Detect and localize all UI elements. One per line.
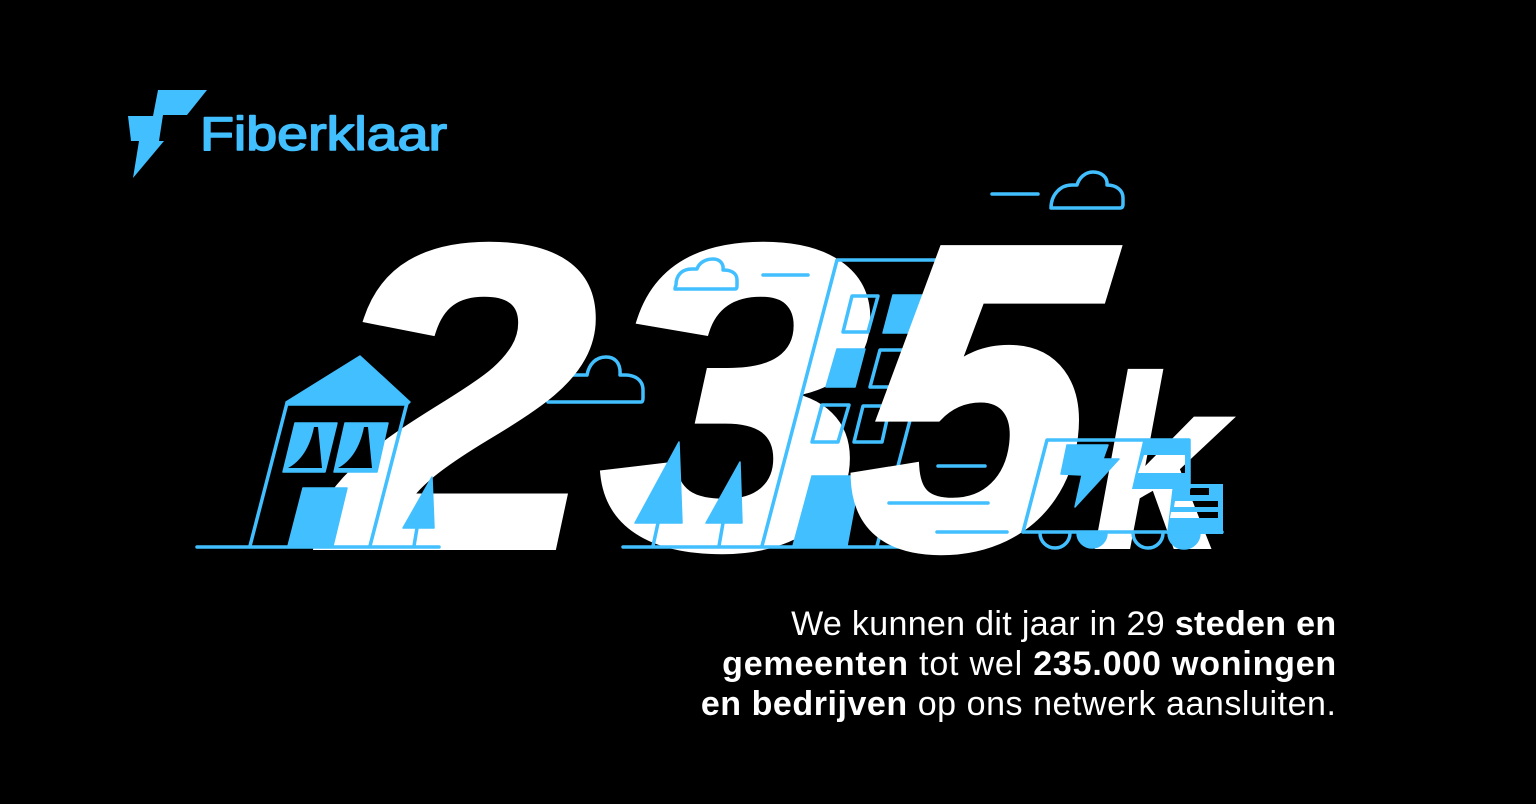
building door [793, 476, 860, 546]
ground line right [623, 545, 905, 549]
text block: description: We kunnen dit jaar in 29 steden en [791, 605, 1336, 643]
big number 5: 5 [832, 158, 1132, 638]
truck chassis [1023, 530, 1222, 534]
illustration: apartment building [762, 260, 952, 546]
text block: description: gemeenten tot wel 235.000 woningen [722, 645, 1337, 683]
house window left [283, 423, 337, 472]
logo wordmark: Fiberklaar [200, 107, 447, 160]
house roof [286, 356, 410, 405]
truck cargo panel [1132, 441, 1190, 489]
icon: top cloud [1051, 172, 1123, 208]
building outline [762, 260, 952, 546]
icon: cloud behind the 2 [548, 357, 643, 402]
text block: description: en bedrijven op ons netwerk aansluiten. [701, 685, 1336, 723]
building windows [812, 295, 922, 442]
tree two [706, 462, 742, 546]
text block: description [701, 605, 1337, 723]
truck bolt [1061, 445, 1119, 507]
dash beside top cloud [992, 192, 1038, 196]
big number 3: 3 [601, 158, 871, 638]
illustration: house [250, 356, 410, 546]
illustration: small tree [403, 477, 434, 546]
house window right [334, 423, 388, 472]
illustration: truck [1023, 440, 1223, 549]
logo: Fiberklaar [128, 90, 447, 178]
icon: cloud on the 3 [675, 259, 737, 289]
truck wheels [1040, 533, 1200, 549]
tree one [635, 442, 682, 546]
ground line left [197, 545, 439, 549]
house door [288, 488, 347, 546]
big number 2: 2 [318, 158, 596, 638]
dash beside cloud [763, 273, 808, 277]
icon: lightning bolt [128, 90, 207, 178]
house walls [250, 403, 407, 546]
truck cargo outline [1023, 440, 1189, 532]
big letter k: k [1093, 328, 1231, 599]
illustration: trees [635, 442, 742, 546]
truck cab [1167, 484, 1223, 534]
speed dashes [889, 466, 1007, 532]
